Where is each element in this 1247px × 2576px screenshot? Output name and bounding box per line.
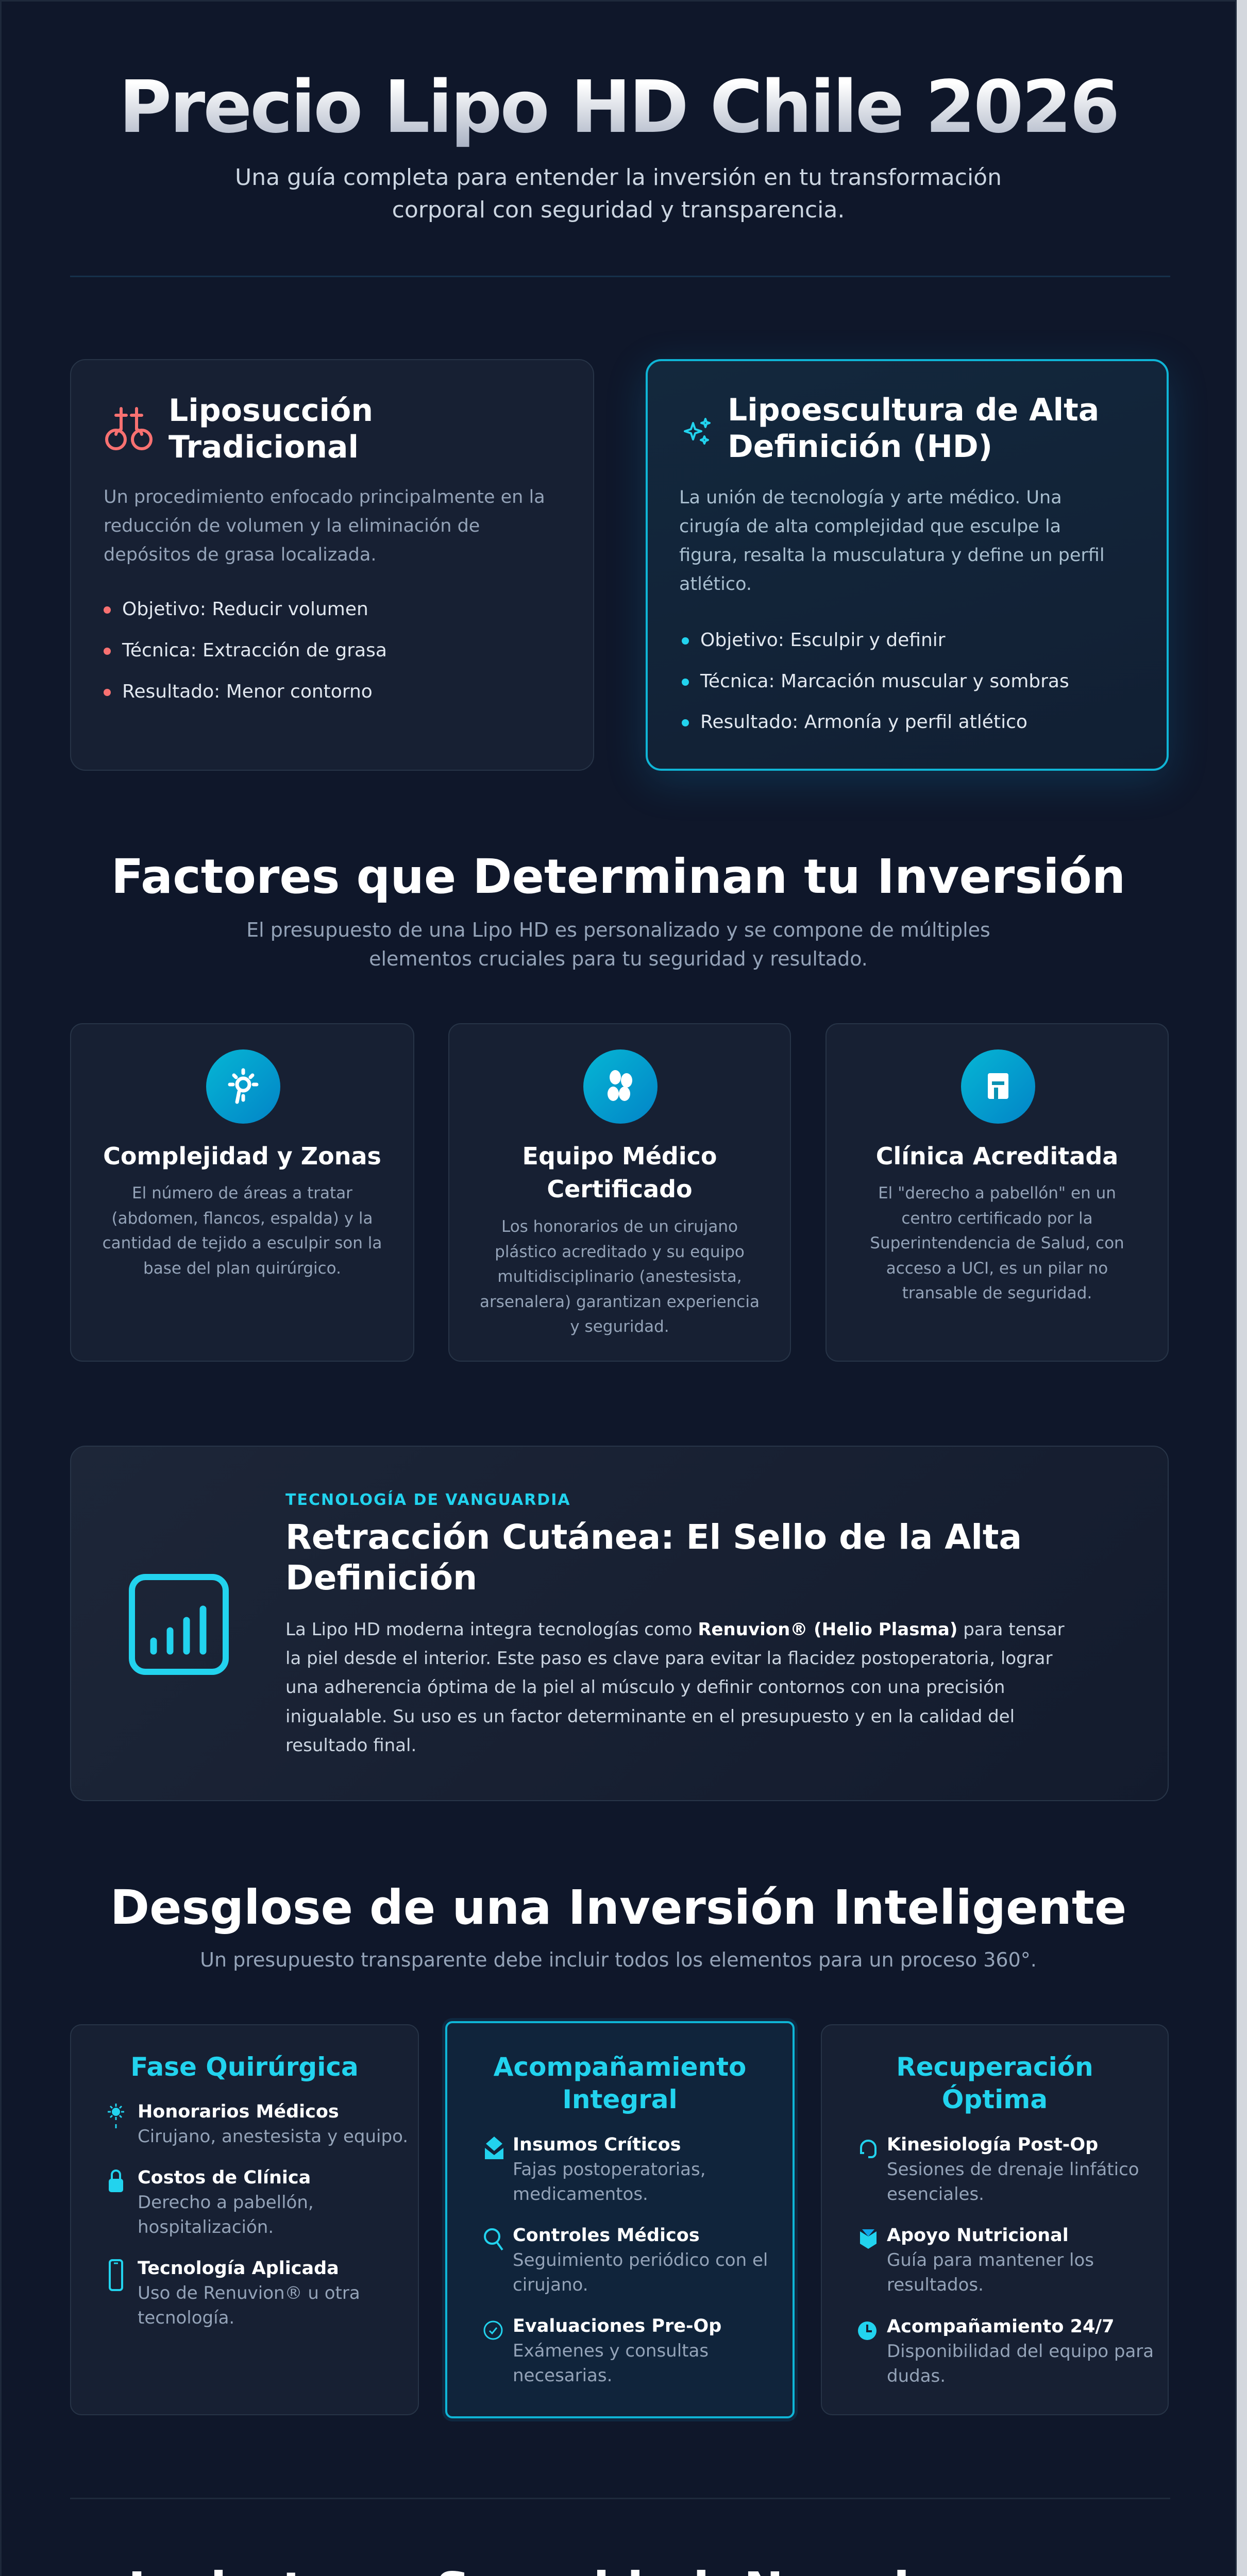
card title: Acompañamiento: [494, 2052, 746, 2082]
bullet list: Objetivo: Esculpir y definir: [700, 630, 946, 651]
description: Un procedimiento enfocado principalmente en la: [104, 487, 545, 507]
heading: Liposucción: [168, 393, 373, 429]
description: atlético.: [679, 574, 752, 595]
panel: recuperacion: [821, 2024, 1169, 2415]
card title: [494, 2052, 746, 2114]
heading: Tradicional: [168, 429, 359, 465]
icon: circle complejidad: [206, 1049, 280, 1124]
item: insumos: medicamentos.: [513, 2184, 648, 2205]
label: TECNOLOGÍA DE VANGUARDIA: [285, 1491, 571, 1509]
bullet list: Resultado: Armonía y perfil atlético: [700, 711, 1027, 733]
item: insumos: Insumos Críticos: [513, 2134, 681, 2155]
item: evaluaciones: necesarias.: [513, 2365, 612, 2386]
panel: acompanamiento integral: [445, 2021, 795, 2418]
heading: Definición: [285, 1558, 477, 1598]
item: kinesiologia: Sesiones de drenaje linfático: [887, 2159, 1139, 2180]
subtitle: [235, 164, 1002, 223]
description: figura, resalta la musculatura y define un perfil: [679, 545, 1105, 566]
item: 24/7: Disponibilidad del equipo para: [887, 2341, 1154, 2362]
subheading: factores: El presupuesto de una Lipo HD es personalizado y se compone de múltiples: [246, 919, 990, 941]
icon: circle team: [583, 1049, 658, 1124]
bullet list: [682, 630, 1069, 733]
card title: Fase Quirúrgica: [130, 2052, 359, 2082]
item: controles: cirujano.: [513, 2275, 588, 2295]
card text: multidisciplinario (anestesista,: [497, 1267, 742, 1286]
body: [285, 1619, 1065, 1756]
icon: lungs: [105, 407, 153, 450]
subheading: factores: [246, 919, 990, 970]
card text: cantidad de tejido a esculpir son la: [103, 1234, 382, 1252]
card text: Los honorarios de un cirujano: [501, 1217, 738, 1236]
item: tecnologia: [109, 2258, 360, 2328]
card title: Integral: [562, 2084, 678, 2114]
item: controles: Controles Médicos: [513, 2225, 700, 2246]
item: tecnologia: Uso de Renuvion® u otra: [138, 2283, 360, 2303]
heading: Lipoescultura de Alta: [728, 392, 1099, 428]
heading: desglose: Desglose de una Inversión Inteligente: [110, 1880, 1126, 1935]
card text: transable de seguridad.: [902, 1284, 1092, 1302]
icon: sparkles: [683, 418, 711, 445]
card text: plástico acreditado y su equipo: [495, 1243, 745, 1261]
item: costos clinica: Costos de Clínica: [138, 2167, 311, 2188]
icon: bar chart: [129, 1574, 229, 1675]
subtitle: corporal con seguridad y transparencia.: [392, 197, 845, 223]
subheading: desglose: Un presupuesto transparente debe incluir todos los elementos para un proceso 360°.: [200, 1948, 1037, 1971]
item: tecnologia: Tecnología Aplicada: [138, 2258, 339, 2279]
heading: [728, 392, 1099, 465]
heading: Definición (HD): [728, 429, 992, 465]
card text: y seguridad.: [570, 1317, 669, 1336]
bullet list: Objetivo: Reducir volumen: [122, 599, 368, 620]
body: una adherencia óptima de la piel al músculo y definir contornos con una precisión: [285, 1677, 1005, 1698]
body: La Lipo HD moderna integra tecnologías como Renuvion® (Helio Plasma) para tensar: [285, 1619, 1065, 1640]
description: La unión de tecnología y arte médico. Una: [679, 487, 1062, 508]
card title: Certificado: [547, 1175, 693, 1203]
panel: liposuccion tradicional: [70, 359, 594, 771]
item: 24/7: Acompañamiento 24/7: [887, 2316, 1114, 2337]
card text: El "derecho a pabellón" en un: [878, 1184, 1116, 1202]
bullet list: [104, 599, 387, 702]
item: insumos: [485, 2134, 706, 2205]
item: evaluaciones: [483, 2316, 721, 2386]
card text: base del plan quirúrgico.: [143, 1259, 341, 1278]
card title: Equipo Médico: [523, 1142, 717, 1170]
item: costos clinica: Derecho a pabellón,: [138, 2192, 314, 2213]
card title: Clínica Acreditada: [876, 1142, 1118, 1170]
panel: lipoescultura HD: [646, 359, 1169, 771]
description: [679, 487, 1105, 595]
card title: Complejidad y Zonas: [103, 1142, 381, 1170]
bullet list: Técnica: Marcación muscular y sombras: [700, 671, 1069, 691]
item: kinesiologia: esenciales.: [887, 2184, 984, 2205]
item: nutricional: [887, 2223, 1094, 2297]
title: Precio Lipo HD Chile 2026: [119, 65, 1118, 149]
icon: circle clinic: [961, 1049, 1035, 1124]
item: insumos: Fajas postoperatorias,: [513, 2159, 706, 2180]
body: resultado final.: [285, 1735, 416, 1756]
item: costos clinica: hospitalización.: [138, 2217, 274, 2238]
description: [104, 487, 545, 565]
item: 24/7: [887, 2314, 1154, 2388]
item: nutricional: resultados.: [887, 2275, 984, 2295]
item: honorarios: [108, 2102, 408, 2147]
subtitle: Una guía completa para entender la inversión en tu transformación: [235, 164, 1002, 191]
bullet list: Resultado: Menor contorno: [122, 681, 373, 702]
card text: centro certificado por la: [901, 1209, 1093, 1227]
bullet list: Técnica: Extracción de grasa: [122, 640, 387, 661]
item: tecnologia: tecnología.: [138, 2308, 234, 2328]
heading: [168, 393, 373, 465]
item: nutricional: Guía para mantener los: [887, 2250, 1094, 2270]
item: evaluaciones: Exámenes y consultas: [513, 2341, 709, 2361]
panel: equipo medico: [448, 1023, 791, 1362]
card text: [870, 1184, 1124, 1302]
card text: [103, 1184, 382, 1278]
card text: acceso a UCI, es un pilar no: [886, 1259, 1108, 1278]
item: honorarios: Cirujano, anestesista y equipo.: [138, 2126, 408, 2147]
panel: tecnologia: [70, 1446, 1169, 1801]
card text: Superintendencia de Salud, con: [870, 1234, 1124, 1252]
body: la piel desde el interior. Este paso es clave para evitar la flacidez postoperatoria, lograr: [285, 1648, 1052, 1669]
heading: factores: Factores que Determinan tu Inversión: [111, 849, 1125, 904]
subheading: factores: elementos cruciales para tu seguridad y resultado.: [369, 947, 868, 970]
heading: [285, 1517, 1022, 1598]
item: controles: [484, 2225, 768, 2295]
card title: Recuperación: [896, 2052, 1093, 2082]
item: costos clinica: [109, 2167, 314, 2238]
card text: El número de áreas a tratar: [132, 1184, 352, 1202]
heading: Retracción Cutánea: El Sello de la Alta: [285, 1517, 1022, 1557]
description: reducción de volumen y la eliminación de: [104, 516, 480, 536]
panel: fase quirurgica: [70, 2024, 419, 2415]
panel: clinica: [825, 1023, 1169, 1362]
card text: [480, 1217, 760, 1336]
item: nutricional: Apoyo Nutricional: [887, 2225, 1069, 2246]
description: cirugía de alta complejidad que esculpe la: [679, 516, 1061, 537]
card title: Óptima: [942, 2084, 1048, 2114]
card text: arsenalera) garantizan experiencia: [480, 1292, 760, 1311]
item: honorarios: Honorarios Médicos: [138, 2102, 339, 2122]
card title: [896, 2052, 1093, 2114]
item: kinesiologia: [887, 2132, 1139, 2207]
card title: [523, 1142, 717, 1203]
item: controles: Seguimiento periódico con el: [513, 2250, 768, 2270]
card text: (abdomen, flancos, espalda) y la: [111, 1209, 373, 1227]
item: kinesiologia: Kinesiología Post-Op: [887, 2134, 1098, 2155]
item: evaluaciones: Evaluaciones Pre-Op: [513, 2316, 721, 2336]
panel: complejidad: [70, 1023, 414, 1362]
body: inigualable. Su uso es un factor determinante en el presupuesto y en la calidad del: [285, 1706, 1015, 1727]
item: 24/7: dudas.: [887, 2366, 946, 2386]
description: depósitos de grasa localizada.: [104, 545, 376, 565]
